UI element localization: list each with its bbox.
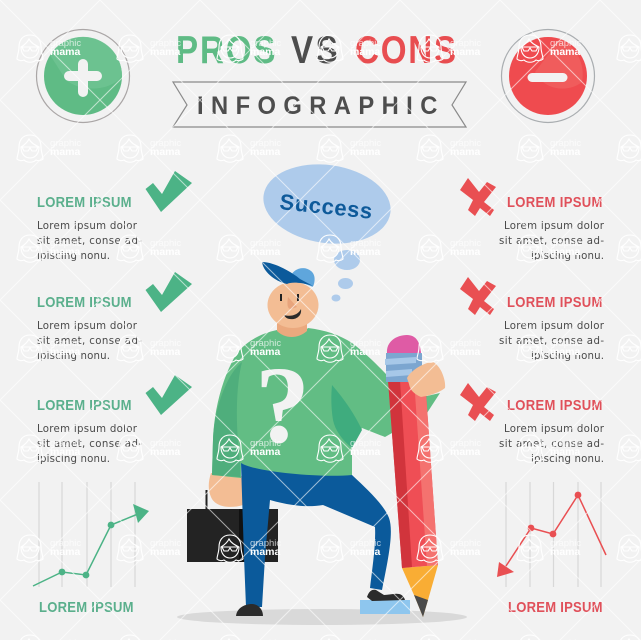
- sweater shading arm: [331, 385, 362, 448]
- head: [268, 282, 318, 328]
- cons text block 3: Lorem ipsum dolor: [504, 424, 605, 435]
- question mark: ?: [255, 344, 310, 466]
- icon: check 3: [146, 375, 192, 415]
- icon: minus badge: [502, 30, 594, 122]
- title: CONS: [355, 27, 456, 72]
- pros text block 2: ipiscing nonu.: [37, 351, 110, 362]
- cons text block 1: ipiscing nonu.: [531, 251, 604, 262]
- pros text block 1: Lorem ipsum dolor: [37, 221, 138, 232]
- nose: [287, 297, 297, 309]
- cap visor: [262, 262, 313, 286]
- pros text block 3: sit amet, conse ad-: [37, 439, 142, 450]
- cons text block 1: sit amet, conse ad-: [499, 236, 604, 247]
- left shoe: [236, 604, 263, 616]
- title: VS: [291, 27, 338, 72]
- chart: falling line: [497, 482, 606, 615]
- pros text block 3: ipiscing nonu.: [37, 454, 110, 465]
- pros text block 1: sit amet, conse ad-: [37, 236, 142, 247]
- icon: plus badge: [36, 30, 130, 122]
- character: [187, 262, 440, 616]
- cons text block 3: LOREM IPSUM: [507, 397, 602, 413]
- icon: cross 3: [460, 383, 496, 421]
- icon: cross 1: [460, 178, 496, 216]
- right hand: [407, 362, 445, 397]
- pros text block 2: [37, 294, 142, 362]
- sweater shading left: [212, 362, 242, 477]
- chart: rising line: LOREM IPSUM: [39, 599, 134, 615]
- neck: [277, 320, 307, 337]
- cons text block 3: ipiscing nonu.: [531, 454, 604, 465]
- right shoe: [367, 590, 405, 601]
- cons text block 1: Lorem ipsum dolor: [504, 221, 605, 232]
- title: [176, 27, 456, 72]
- cap dome: [290, 268, 315, 287]
- chart: rising line: [33, 482, 149, 615]
- cons text block 2: Lorem ipsum dolor: [504, 321, 605, 332]
- thought bubble: [258, 156, 396, 302]
- pros text block 1: ipiscing nonu.: [37, 251, 110, 262]
- sweater: [212, 328, 440, 478]
- pros text block 2: sit amet, conse ad-: [37, 336, 142, 347]
- ribbon subtitle: [173, 82, 466, 127]
- pros text block 1: [37, 194, 142, 262]
- cons text block 3: [499, 397, 605, 465]
- cons text block 2: [499, 294, 605, 362]
- cons text block 1: [499, 194, 605, 262]
- pros text block 1: LOREM IPSUM: [37, 194, 132, 210]
- pros text block 2: Lorem ipsum dolor: [37, 321, 138, 332]
- icon: cross 2: [460, 277, 496, 315]
- smile: [284, 309, 301, 319]
- eyes: [281, 294, 298, 301]
- icon: check 2: [146, 272, 192, 312]
- cons text block 2: LOREM IPSUM: [507, 294, 602, 310]
- pencil: [385, 335, 438, 617]
- trousers: [241, 463, 391, 607]
- foot block: [360, 600, 410, 614]
- pros text block 2: LOREM IPSUM: [37, 294, 132, 310]
- ground shadow: [177, 609, 467, 625]
- icon: check 1: [146, 171, 192, 212]
- left hand: [209, 473, 243, 507]
- ribbon subtitle: INFOGRAPHIC: [197, 92, 437, 120]
- cons text block 1: LOREM IPSUM: [507, 194, 602, 210]
- briefcase: [187, 490, 278, 562]
- pros text block 3: LOREM IPSUM: [37, 397, 132, 413]
- chart: falling line: LOREM IPSUM: [508, 599, 603, 615]
- cons text block 2: ipiscing nonu.: [531, 351, 604, 362]
- pros text block 3: Lorem ipsum dolor: [37, 424, 138, 435]
- cons text block 2: sit amet, conse ad-: [499, 336, 604, 347]
- title: PROS: [176, 27, 275, 72]
- pros text block 3: [37, 397, 142, 465]
- thought bubble: Success: [278, 189, 374, 224]
- cons text block 3: sit amet, conse ad-: [499, 439, 604, 450]
